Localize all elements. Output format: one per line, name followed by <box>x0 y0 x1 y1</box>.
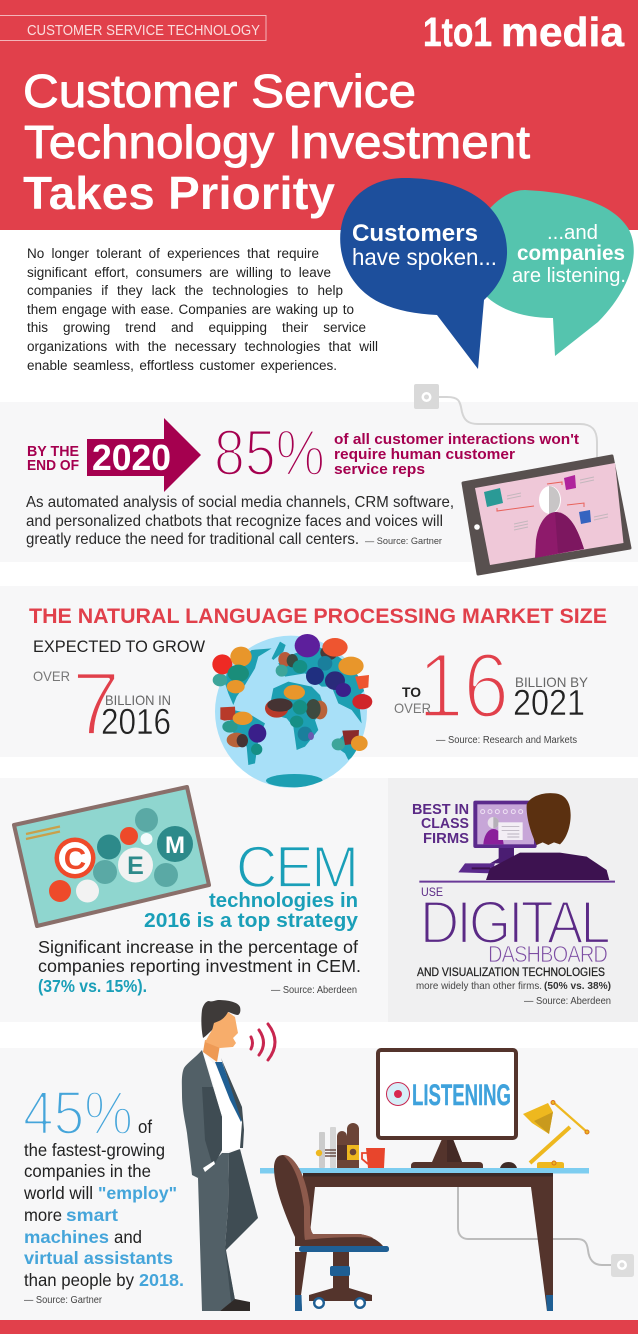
stat: to over 16 billion by 2021 <box>394 635 589 737</box>
intro paragraph: significant effort, consumers are willing to leave <box>27 265 331 280</box>
icon: person at monitor <box>419 793 615 882</box>
icon: tablet <box>463 456 630 574</box>
icon: CEM card <box>14 787 209 926</box>
stat: to over 16 billion by 2021: BILLION BY <box>515 674 589 690</box>
speech bubble: companies: are listening. <box>512 265 626 287</box>
panel: 2020 prediction background <box>0 402 638 562</box>
stat description: service reps <box>334 462 425 478</box>
stat: over 7 billion in 2016 <box>33 655 171 755</box>
stat: 85%: 85% <box>214 416 325 489</box>
icon: CEM card: M <box>165 832 185 859</box>
automated analysis text: As automated analysis of social media channels, CRM software, <box>26 494 454 511</box>
panel: listening background <box>0 1048 638 1320</box>
best in class firms label: BEST IN <box>412 802 469 818</box>
automated analysis text: — Source: Gartner <box>365 536 442 547</box>
intro paragraph: companies if they lack the technologies to help <box>27 283 343 298</box>
virtual assistants text: of <box>138 1117 153 1137</box>
title: Customer Service <box>23 65 416 117</box>
dashboard text: AND VISUALIZATION TECHNOLOGIES <box>417 967 605 979</box>
icon: standing man <box>182 1000 258 1311</box>
cable <box>458 1187 613 1265</box>
section tag <box>0 16 266 40</box>
title: Technology Investment <box>24 116 530 168</box>
panel: market size background <box>0 586 638 757</box>
speech bubble: customers: Customers <box>352 220 478 247</box>
CEM headline: CEM <box>236 835 357 900</box>
logo <box>423 9 625 55</box>
stat description: require human customer <box>334 447 515 463</box>
icon: outlet <box>611 1254 634 1277</box>
stat: 45%: 45% <box>23 1079 133 1147</box>
CEM body text: (37% vs. 15%). <box>38 976 147 996</box>
icon: CEM card: E <box>127 852 144 880</box>
virtual assistants text: than people by <box>24 1270 134 1290</box>
icon: monitor <box>378 1050 516 1168</box>
footer band <box>0 1320 638 1334</box>
virtual assistants text: machines <box>24 1227 109 1247</box>
source: research and markets: — Source: Research and Markets <box>436 735 577 746</box>
speech bubble: customers <box>340 178 507 369</box>
virtual assistants text: world will <box>23 1183 93 1203</box>
icon: desk lamp <box>523 1100 589 1168</box>
dashboard text: more widely than other firms. <box>416 980 542 992</box>
heading: NLP market size: THE NATURAL LANGUAGE PROCESSING MARKET SIZE <box>29 605 607 628</box>
best in class firms label: CLASS <box>421 816 469 832</box>
panel: dashboard background <box>388 778 638 1022</box>
icon: mug <box>362 1148 385 1168</box>
CEM body text <box>38 937 361 996</box>
icon: power outlet and cable <box>414 384 597 462</box>
speech bubble: companies: companies <box>517 242 625 265</box>
stat: over 7 billion in 2016: 7 <box>72 655 120 755</box>
icon: mouse <box>500 1162 517 1168</box>
stat: to over 16 billion by 2021: OVER <box>394 700 431 716</box>
stat: over 7 billion in 2016: BILLION IN <box>105 692 171 708</box>
best in class firms label <box>412 802 469 847</box>
intro paragraph: them engage with ease. Companies are waking up to <box>27 302 354 317</box>
logo: media <box>501 9 625 55</box>
stat: over 7 billion in 2016: OVER <box>33 668 70 684</box>
automated analysis text: and personalized chatbots that recognize faces and voices will <box>26 513 443 530</box>
speech bubble: customers: have spoken... <box>352 244 497 270</box>
intro paragraph: No longer tolerant of experiences that require <box>27 246 319 261</box>
stat: to over 16 billion by 2021: 16 <box>418 635 509 737</box>
CEM strategy text: 2016 is a top strategy <box>144 910 359 932</box>
virtual assistants text: the fastest-growing <box>24 1140 165 1160</box>
best in class firms label: FIRMS <box>423 831 469 847</box>
title: Takes Priority <box>23 167 335 219</box>
virtual assistants text: and <box>114 1227 142 1247</box>
by the end of 2020 arrow <box>27 418 201 492</box>
automated analysis text: greatly reduce the need for traditional call centers. <box>26 531 359 548</box>
CEM body text: companies reporting investment in CEM. <box>38 956 361 976</box>
intro paragraph: organizations with the necessary technologies that will <box>27 339 378 354</box>
virtual assistants text: smart <box>66 1205 118 1225</box>
speech bubble: companies <box>480 190 634 356</box>
icon: office chair <box>274 1155 389 1311</box>
expected to grow text: EXPECTED TO GROW <box>33 637 205 656</box>
panel: CEM background <box>0 778 388 1022</box>
virtual assistants text: virtual assistants <box>24 1248 173 1268</box>
by the end of 2020 arrow: END OF <box>27 457 79 474</box>
CEM strategy text <box>144 890 359 932</box>
virtual assistants text <box>23 1117 184 1290</box>
stat: to over 16 billion by 2021: TO <box>402 684 421 700</box>
virtual assistants text: 2018. <box>139 1270 184 1290</box>
icon: desk <box>260 1168 589 1311</box>
CEM strategy text: technologies in <box>209 890 358 912</box>
logo: 1to1 <box>423 9 492 55</box>
by the end of 2020 arrow: BY THE <box>27 443 79 460</box>
source: aberdeen: — Source: Aberdeen <box>271 985 357 996</box>
icon: sound waves <box>251 1024 275 1060</box>
source: gartner: — Source: Gartner <box>24 1295 103 1306</box>
virtual assistants text: companies in the <box>24 1161 151 1181</box>
intro paragraph <box>27 246 378 373</box>
source: aberdeen: — Source: Aberdeen <box>524 996 611 1007</box>
icon: record target <box>386 1082 410 1106</box>
section tag: CUSTOMER SERVICE TECHNOLOGY <box>27 23 260 39</box>
automated analysis text <box>26 494 454 548</box>
header band <box>0 0 638 230</box>
dashboard text: (50% vs. 38%) <box>544 980 611 992</box>
dashboard text <box>416 967 611 992</box>
virtual assistants text: more <box>24 1205 62 1225</box>
digital headline: DIGITAL <box>420 889 609 956</box>
listening label: LISTENING <box>412 1079 511 1112</box>
CEM body text: Significant increase in the percentage of <box>38 937 358 957</box>
title <box>23 65 530 219</box>
intro paragraph: this growing trend and equipping their service <box>27 320 366 335</box>
speech bubble: companies: ...and <box>547 222 598 244</box>
virtual assistants text: "employ" <box>98 1183 177 1203</box>
by the end of 2020 arrow: 2020 <box>92 437 171 478</box>
icon: books <box>316 1123 359 1168</box>
use label: USE <box>421 885 443 899</box>
icon: globe with speech bubbles <box>212 634 372 788</box>
stat: to over 16 billion by 2021: 2021 <box>513 682 585 723</box>
dashboard headline: DASHBOARD <box>488 941 607 967</box>
stat: over 7 billion in 2016: 2016 <box>101 701 171 742</box>
intro paragraph: enable seamless, effortless customer experiences. <box>27 358 337 373</box>
stat description <box>334 432 579 478</box>
icon: CEM card: C <box>64 841 86 876</box>
stat description: of all customer interactions won't <box>334 432 579 448</box>
